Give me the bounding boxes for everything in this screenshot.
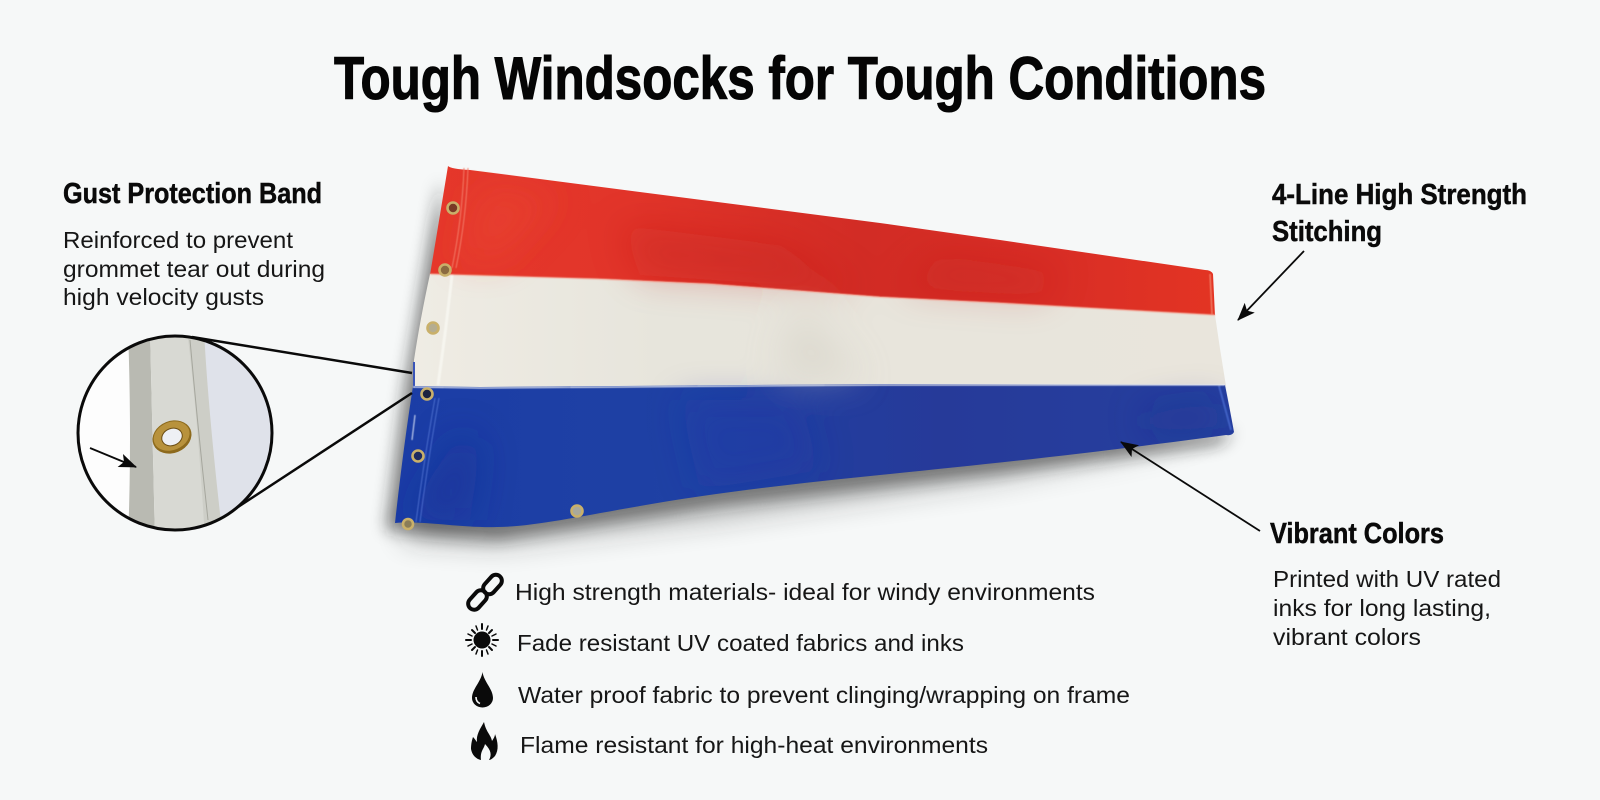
callout: gust protection band [63, 178, 325, 310]
zoom connector lines [192, 337, 412, 507]
description: high velocity gusts [63, 284, 264, 310]
red stripe [430, 166, 1215, 316]
heading: Stitching [1272, 216, 1382, 248]
windsock shadow [386, 180, 1234, 546]
band arrow [90, 448, 136, 467]
description: Printed with UV rated [1273, 566, 1501, 592]
icon: sun [466, 624, 498, 656]
description [1273, 566, 1501, 650]
gust protection band [128, 341, 154, 526]
feature: waterproof: Water proof fabric to prevent clinging/wrapping on frame [518, 682, 1130, 708]
windsock photo [386, 166, 1234, 546]
icon: chain link [466, 572, 504, 612]
small blue sliver at the hem [413, 362, 415, 388]
heading: Vibrant Colors [1270, 518, 1444, 550]
description: grommet tear out during [63, 256, 325, 282]
feature list [466, 572, 1130, 760]
feature: materials: High strength materials- ideal for windy environments [515, 579, 1095, 605]
grommets [403, 202, 582, 529]
white stripe [413, 274, 1226, 388]
description: Reinforced to prevent [63, 227, 294, 253]
heading [1272, 179, 1527, 248]
hem stitching [412, 168, 1231, 522]
band centre [150, 338, 204, 528]
heading: Gust Protection Band [63, 178, 322, 210]
arrow to fabric [1121, 442, 1260, 531]
description: vibrant colors [1273, 624, 1421, 650]
icon: flame [471, 722, 498, 760]
feature: flame: Flame resistant for high-heat environments [520, 732, 988, 758]
fabric folds [476, 171, 1230, 409]
blue stripe [395, 384, 1234, 527]
brass grommet [152, 420, 192, 454]
callout: stitching [1238, 179, 1527, 320]
description [63, 227, 325, 310]
feature: UV: Fade resistant UV coated fabrics and inks [517, 630, 964, 656]
heading: 4-Line High Strength [1272, 179, 1527, 211]
circle outline [78, 336, 272, 530]
callout: vibrant colors [1121, 442, 1501, 650]
icon: water drop [472, 672, 493, 708]
backing fabric [204, 342, 270, 517]
arrow to stitching [1238, 251, 1304, 320]
magnified detail circle [78, 330, 280, 540]
description: inks for long lasting, [1273, 595, 1491, 621]
title: Tough Windsocks for Tough Conditions [334, 45, 1266, 112]
